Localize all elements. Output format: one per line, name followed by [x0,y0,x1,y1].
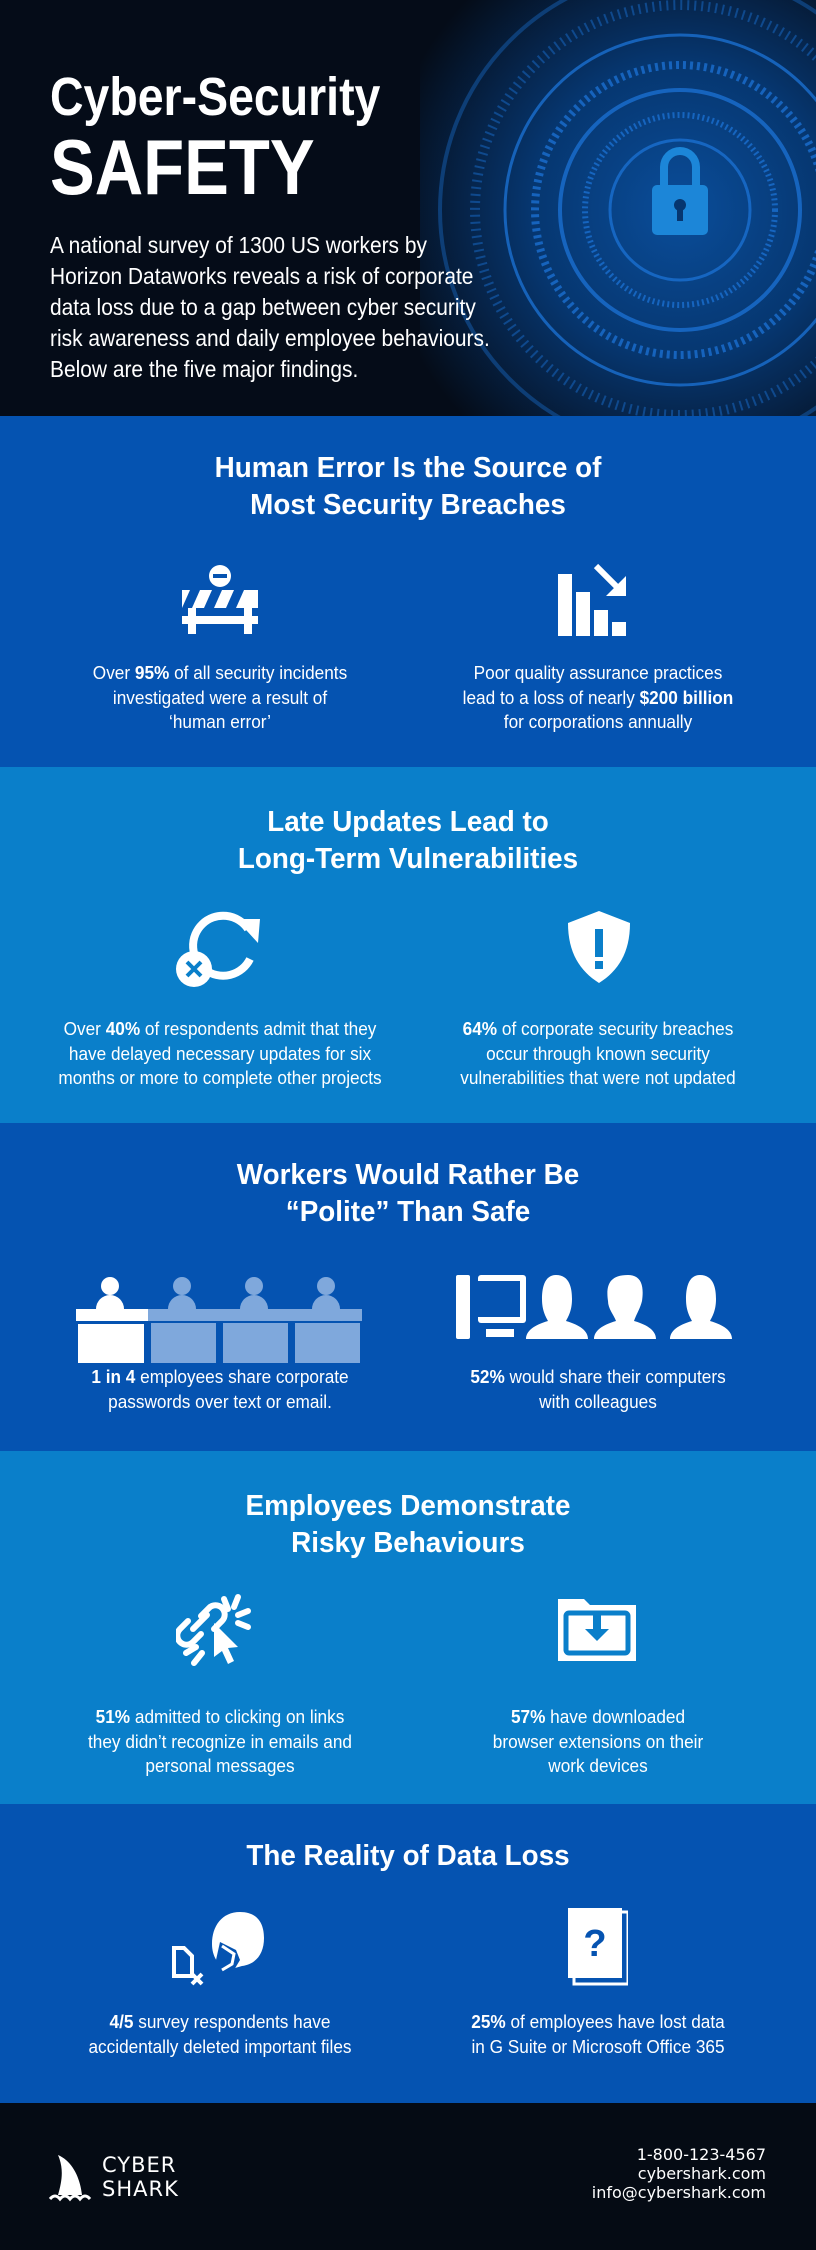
icon: deleted file and facepalm [172,1912,264,1986]
stat: 40%: months or more to complete other projects [58,1067,382,1088]
stat: 25% [471,2011,725,2056]
heading: Risky Behaviours [291,1527,525,1559]
contact info: 1-800-123-4567 [637,2145,766,2164]
heading: The Reality of Data Loss [246,1840,570,1872]
stat: $200 billion: for corporations annually [504,711,692,732]
stat: $200 billion: lead to a loss of nearly $200 billion [463,686,733,708]
icon: desks with workers [76,1277,362,1363]
title: Cyber-Security [50,67,380,127]
icon: shield warning [568,911,630,983]
stat: 52%: 52% would share their computers [470,1366,726,1387]
stat: 4/5: 4/5 survey respondents have [110,2011,330,2032]
stat: 1 in 4: 1 in 4 employees share corporate [91,1366,349,1387]
logo: cyber shark [48,2153,179,2202]
stat: 57%: browser extensions on their [493,1730,703,1752]
stat: 4/5 [88,2011,351,2057]
icon: question book [568,1908,628,1986]
stat: 64% [460,1018,736,1088]
heading [238,806,578,875]
stat: 95%: investigated were a result of [113,686,327,708]
stat: 57%: 57% have downloaded [511,1706,685,1727]
icon: computer and people [456,1275,732,1339]
intro text [50,232,490,382]
heading [215,452,602,521]
logo: cyber shark: CYBER [102,2153,176,2177]
stat: 51%: 51% admitted to clicking on links [96,1706,344,1727]
heading: Human Error Is the Source of [215,452,601,484]
stat: 64%: 64% of corporate security breaches [463,1018,733,1039]
title: SAFETY [50,123,315,211]
stat: 40%: have delayed necessary updates for six [69,1042,371,1064]
stat: $200 billion: Poor quality assurance practices [474,662,722,683]
stat: 95%: ‘human error’ [169,711,271,732]
icon: padlock [652,147,708,235]
contact info [592,2145,766,2202]
intro text: data loss due to a gap between cyber security [50,294,476,320]
stat: 52% [470,1366,726,1412]
stat: 1 in 4 [91,1366,349,1412]
icon: declining bar chart [558,564,626,636]
icon: question book: ? [583,1923,607,1965]
heading [246,1490,570,1559]
intro text: Horizon Dataworks reveals a risk of corporate [50,263,473,289]
stat: 25%: in G Suite or Microsoft Office 365 [471,2036,725,2056]
intro text: Below are the five major findings. [50,356,358,382]
stat: $200 billion [463,662,733,732]
stat: 1 in 4: passwords over text or email. [108,1390,332,1412]
intro text: A national survey of 1300 US workers by [50,232,427,258]
stat: 51%: personal messages [145,1755,295,1776]
stat: 25%: 25% of employees have lost data [471,2011,725,2032]
heading [236,1159,579,1228]
panel: polite [0,1123,816,1451]
stat: 57%: work devices [548,1755,648,1776]
icon: refresh with x [176,912,260,987]
stat: 64%: occur through known security [486,1042,710,1064]
heading: Late Updates Lead to [267,806,549,838]
header graphic: circuit circles with lock [420,0,816,416]
contact info: cybershark.com [638,2164,766,2183]
intro text: risk awareness and daily employee behaviours. [50,325,490,351]
heading: Most Security Breaches [250,489,566,521]
stat: 95% [93,662,347,732]
stat: 52%: with colleagues [539,1390,657,1412]
heading: Employees Demonstrate [246,1490,570,1522]
stat: 40%: Over 40% of respondents admit that they [64,1018,376,1039]
stat: 57% [493,1706,703,1776]
icon: roadblock barrier [182,565,258,634]
stat: 64%: vulnerabilities that were not updated [460,1067,736,1088]
panel: human error [0,416,816,767]
stat: 51% [88,1706,352,1776]
panel: data loss [0,1804,816,2103]
header panel [0,0,816,416]
logo: cyber shark: SHARK [102,2177,179,2201]
panel: risky behaviours [0,1451,816,1804]
stat: 40% [58,1018,382,1088]
icon: link with cursor [176,1594,251,1666]
heading: Long-Term Vulnerabilities [238,843,578,875]
heading: Workers Would Rather Be [237,1159,579,1191]
title [50,67,380,211]
stat: 95%: Over 95% of all security incidents [93,662,347,683]
panel: late updates [0,767,816,1123]
stat: 4/5: accidentally deleted important files [88,2036,351,2056]
icon: download folder [558,1599,636,1661]
footer [0,2103,816,2250]
stat: 51%: they didn’t recognize in emails and [88,1730,352,1752]
contact info: info@cybershark.com [592,2183,766,2202]
heading: “Polite” Than Safe [286,1196,530,1228]
